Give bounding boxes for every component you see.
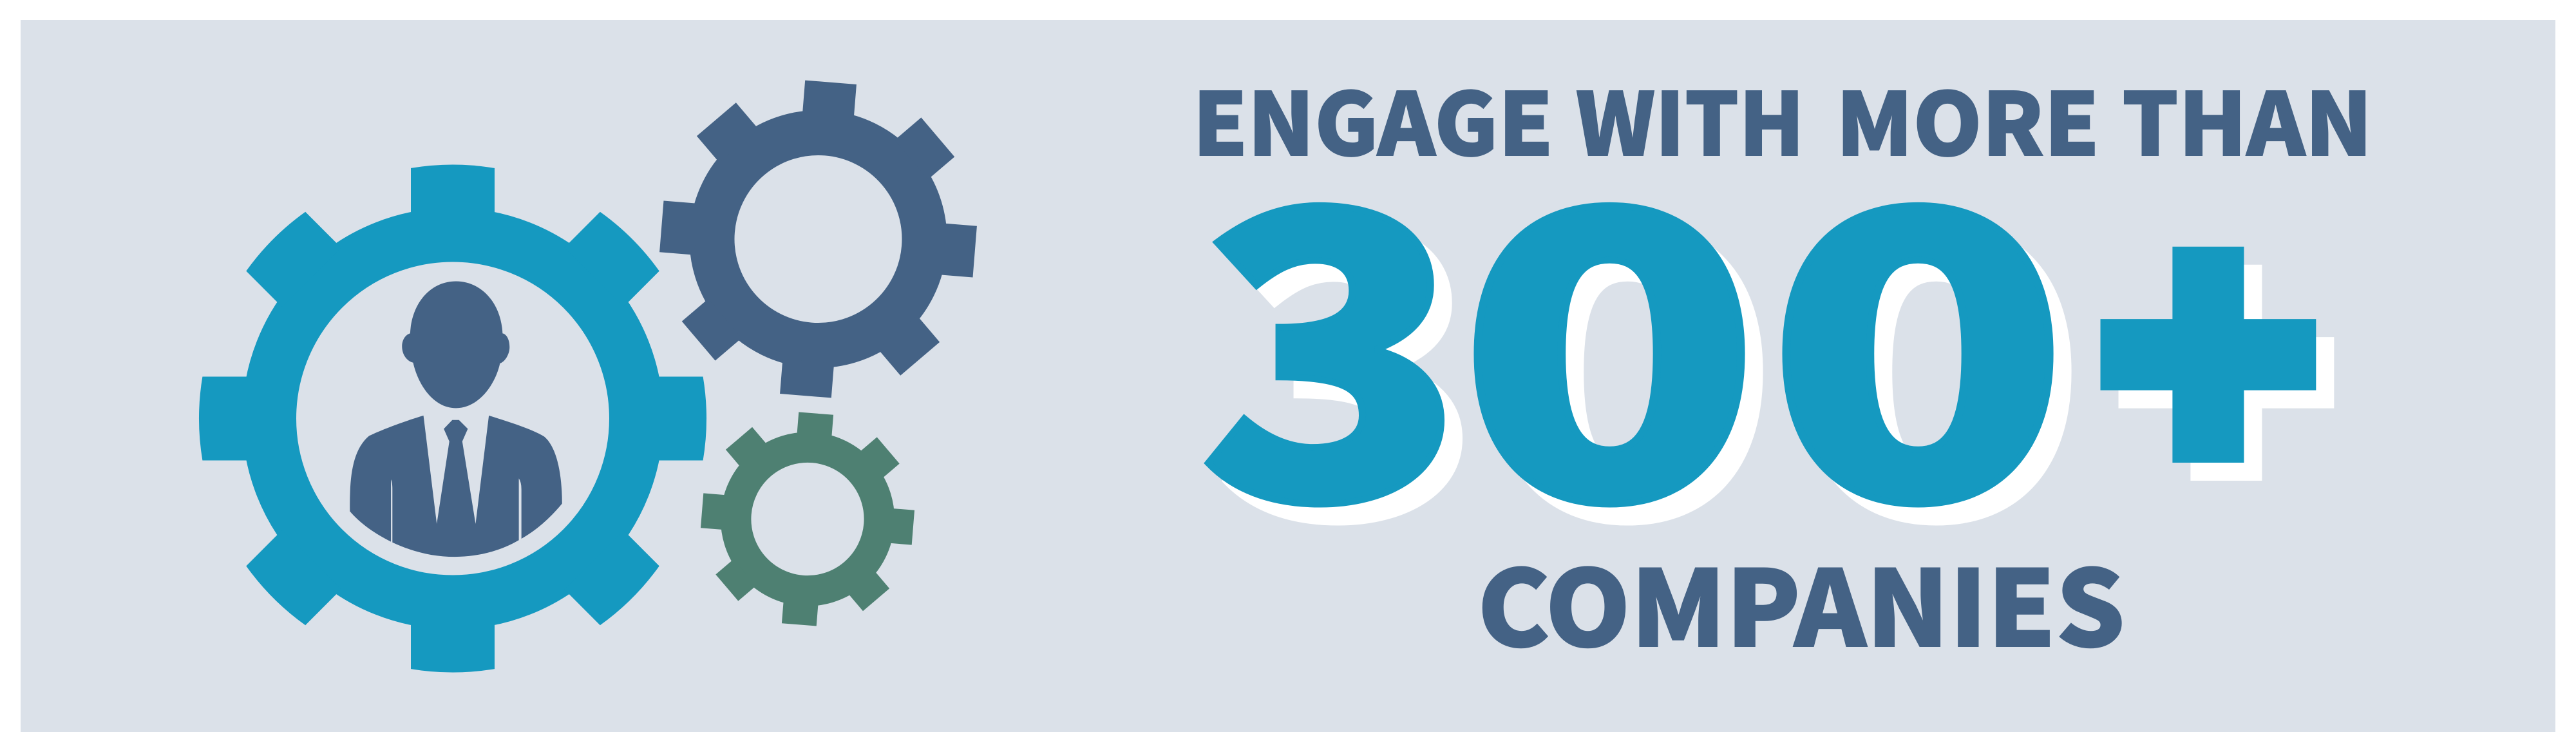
label: companies: COMPANIES: [1477, 525, 2125, 677]
big number: 300+: 3: [1198, 40, 1465, 613]
big number: 300+: [1198, 40, 2327, 613]
icon: large blue gear: [199, 165, 706, 672]
big number shadow: 3: [1216, 58, 1483, 631]
heading: engage with more than: [1193, 55, 2372, 180]
big number: 300+: 0: [1766, 40, 2070, 613]
icon: businessman silhouette: [350, 281, 562, 557]
big number shadow: 0: [1475, 58, 1779, 631]
big number shadow: [1216, 58, 2345, 631]
heading: engage with more than: MORE: [1836, 55, 2099, 180]
big number shadow: +: [2108, 199, 2345, 528]
big number shadow: 0: [1784, 58, 2088, 631]
suit and tie: [350, 416, 562, 557]
icon: navy gear: [649, 70, 987, 409]
head: [402, 281, 509, 408]
icon: green gear: [694, 405, 922, 633]
heading: engage with more than: THAN: [2122, 55, 2372, 180]
big number: 300+: 0: [1457, 40, 1761, 613]
heading: engage with more than: ENGAGE: [1193, 55, 1553, 180]
big number: 300+: +: [2090, 181, 2327, 510]
heading: engage with more than: WITH: [1576, 55, 1804, 180]
